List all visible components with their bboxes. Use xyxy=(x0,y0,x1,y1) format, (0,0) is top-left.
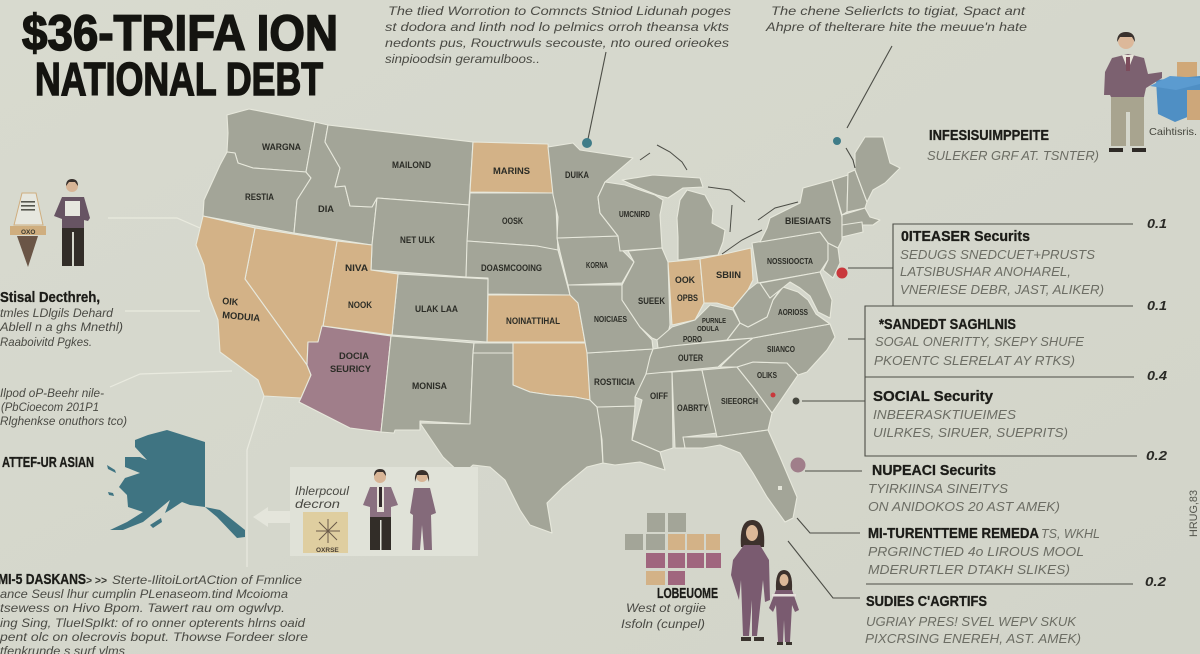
value labels xyxy=(1145,217,1167,589)
map state labels: PORO xyxy=(683,335,702,344)
panel: people callout: OXRSE xyxy=(316,547,339,554)
map state labels: NET ULK xyxy=(400,235,435,246)
text block: sudies cagrtifs: SUDIES C'AGRTIFS xyxy=(866,594,987,610)
map state labels: DUIKA xyxy=(565,170,589,181)
text block: nupeaci securits: NUPEACI Securits xyxy=(872,463,996,479)
text block: mi-5 daskans: > >> xyxy=(86,575,107,587)
map state labels: OOSK xyxy=(502,216,523,227)
legend caption: LOBEUOME xyxy=(657,586,718,602)
text block: stisal decthreh: Raaboivitd Pgkes. xyxy=(0,335,92,349)
text block: stisal decthreh: tmles LDlgils Dehard xyxy=(0,306,113,320)
map state labels: KORNA xyxy=(586,261,608,270)
text block: infesisumppeite xyxy=(927,128,1099,163)
arrow pointing left xyxy=(253,507,290,527)
map state labels: SUEEK xyxy=(638,296,665,307)
map state labels: OIK xyxy=(222,296,239,308)
text block: social security: UILRKES, SIRUER, SUEPRITS) xyxy=(873,425,1068,440)
map state labels: OIFF xyxy=(650,391,668,402)
map state labels: MONISA xyxy=(412,381,447,392)
top right text block xyxy=(765,4,1027,34)
text block: social security xyxy=(873,389,1068,440)
icon: man with boxes xyxy=(1104,32,1200,152)
text block: mi-5 daskans: Sterte-IlitoiLortACtion of Fmnlice xyxy=(112,573,302,587)
map state labels: AORIOSS xyxy=(778,308,809,317)
map state labels: MARINS xyxy=(493,166,530,177)
map state labels: OOK xyxy=(675,275,695,286)
text block: mi-5 daskans: MI-5 DASKANS xyxy=(0,572,86,588)
map state labels xyxy=(222,142,831,414)
text block: oiteaser securits xyxy=(900,229,1104,297)
value labels: 0.1 xyxy=(1147,299,1167,313)
map state labels: ULAK LAA xyxy=(415,304,458,315)
map state labels: OPBS xyxy=(677,293,698,304)
text block: mi-5 daskans: tsewess on Hivo Bpom. Tawert rau om ogwlvp. xyxy=(0,601,285,615)
text block: types of benefits: Ilpod oP-Beehr nile- xyxy=(0,386,104,400)
text block: sudies cagrtifs: UGRIAY PRES! SVEL WEPV SKUK xyxy=(866,614,1077,629)
map state labels: NOINATTIHAL xyxy=(506,316,560,327)
panel: people callout: decron xyxy=(295,497,340,511)
map state labels: SIIANCO xyxy=(767,345,795,354)
text block: oiteaser securits: SEDUGS SNEDCUET+PRUSTS xyxy=(900,247,1095,262)
icon: document stand and presenter: OXO xyxy=(21,229,35,236)
US state map xyxy=(196,109,900,533)
legend caption: West ot orgiie xyxy=(626,601,706,615)
text block: sandedt saghlnis: SOGAL ONERITTY, SKEPY SHUFE xyxy=(875,334,1084,349)
top right text block: The chene Selierlcts to tigiat, Spact ant xyxy=(771,4,1026,18)
map state labels: MAILOND xyxy=(392,160,431,171)
map state labels: RESTIA xyxy=(245,192,274,203)
map state labels: DOCIA xyxy=(339,351,369,362)
map state labels: MODUIA xyxy=(222,310,261,324)
vertical side note: HRUG,83 xyxy=(1188,490,1200,537)
text block: stisal decthreh: Stisal Decthreh, xyxy=(0,290,100,306)
text block: mi-turentteme remedats: MI-TURENTTEME REMEDA xyxy=(868,526,1039,542)
map state labels: BIESIAATS xyxy=(785,216,831,227)
callout: leader lines to map xyxy=(588,46,893,598)
intro text block: The tlied Worrotion to Comncts Stniod Lidunah poges xyxy=(388,4,731,18)
text block: infesisumppeite: SULEKER GRF AT. TSNTER) xyxy=(927,148,1099,163)
panel: people callout xyxy=(253,467,478,556)
icon: man with boxes: Caihtisris. xyxy=(1149,126,1197,138)
value labels: 0.2 xyxy=(1146,449,1167,463)
map state labels: OABRTY xyxy=(677,403,709,414)
intro text block: sinpioodsin geramulboos.. xyxy=(385,52,540,66)
text block: oiteaser securits: 0ITEASER Securits xyxy=(901,229,1030,245)
map state labels: DIA xyxy=(318,204,334,215)
map state labels: NOOK xyxy=(348,300,372,311)
text block: mi-turentteme remedats: TS, WKHL xyxy=(1041,526,1100,541)
map state labels: DOASMCOOING xyxy=(481,263,542,274)
text block: sandedt saghlnis xyxy=(874,317,1084,368)
top right text block: Ahpre of thelterare hite the meuue'n hate xyxy=(765,20,1027,34)
alaska label: ATTEF-UR ASIAN xyxy=(2,455,94,471)
text block: sandedt saghlnis: *SANDEDT SAGHLNIS xyxy=(879,317,1016,333)
text block: mi-5 daskans: pent olc on olecrovis boput. Thowse Fordeer slore xyxy=(0,630,308,644)
text block: mi-turentteme remedats: PRGRINCTIED 4o LIROUS MOOL xyxy=(868,544,1084,559)
text block: types of benefits: (PbCioecom 201P1 xyxy=(1,400,99,414)
text block: types of benefits: Rlghenkse onuthors tco) xyxy=(0,414,127,428)
text block: social security: INBEERASKTIUEIMES xyxy=(873,407,1016,422)
text block: types of benefits xyxy=(0,386,127,428)
legend caption: Isfoln (cunpel) xyxy=(621,617,705,631)
map state labels: ROSTIICIA xyxy=(594,377,635,388)
text block: stisal decthreh: Ablell n a ghs Mnethl) xyxy=(0,320,123,334)
map state labels: SBIIN xyxy=(716,270,741,281)
map state labels: OLIKS xyxy=(757,371,778,380)
map state labels: SEURICY xyxy=(330,364,372,375)
left pointer lines xyxy=(108,218,264,567)
text block: nupeaci securits: ON ANIDOKOS 20 AST AMEK) xyxy=(868,499,1060,514)
text block: mi-5 daskans xyxy=(0,572,308,654)
right panel frame lines xyxy=(865,224,1137,584)
map state labels: ODULA xyxy=(697,324,719,333)
text block: social security: SOCIAL Security xyxy=(873,389,993,405)
map marker dots xyxy=(582,137,848,490)
icon: document stand and presenter xyxy=(10,179,90,267)
title: NATIONAL DEBT xyxy=(35,53,323,105)
map state labels: PURNLE xyxy=(702,316,726,325)
title xyxy=(22,5,338,105)
map state labels: NOICIAES xyxy=(594,315,628,324)
text block: nupeaci securits xyxy=(868,463,1060,514)
map state labels: SIEEORCH xyxy=(721,397,758,406)
panel: people callout: Ihlerpcoul xyxy=(295,484,349,498)
text block: sandedt saghlnis: PKOENTC SLERELAT AY RTKS) xyxy=(874,353,1075,368)
legend grid xyxy=(621,513,721,631)
value labels: 0.4 xyxy=(1147,369,1167,383)
text block: sudies cagrtifs xyxy=(865,594,1081,646)
map state labels: NIVA xyxy=(345,263,368,274)
value labels: 0.2 xyxy=(1145,575,1166,589)
text block: sudies cagrtifs: PIXCRSING ENEREH, AST. AMEK) xyxy=(865,631,1081,646)
text block: oiteaser securits: LATSIBUSHAR ANOHAREL, xyxy=(900,264,1071,279)
text block: mi-5 daskans: ance Seusl lhur cumplin PLenaseom.tind Mcoioma xyxy=(0,587,288,601)
text block: stisal decthreh xyxy=(0,290,123,349)
text block: nupeaci securits: TYIRKIINSA SINEITYS xyxy=(868,481,1008,496)
title: $36-TRIFA ION xyxy=(22,5,338,61)
icon: woman and child xyxy=(731,520,799,645)
text block: mi-turentteme remedats xyxy=(868,526,1100,577)
text block: infesisumppeite: INFESISUIMPPEITE xyxy=(929,128,1049,144)
map state labels: WARGNA xyxy=(262,142,301,153)
great lakes outlines xyxy=(640,145,798,254)
map state labels: OUTER xyxy=(678,353,703,364)
value labels: 0.1 xyxy=(1147,217,1167,231)
map state labels: NOSSIOOCTA xyxy=(767,257,813,266)
text block: oiteaser securits: VNERIESE DEBR, JAST, ALIKER) xyxy=(900,282,1104,297)
legend caption xyxy=(621,586,718,631)
alaska map xyxy=(107,430,245,538)
text block: mi-5 daskans: ing Sing, TlueISpIkt: of ro onner opterents hlrns oaid xyxy=(0,616,305,630)
map state labels: UMCNIRD xyxy=(619,210,650,219)
intro text block: st dodora and linth nod lo pelmics orroh theansa vkts xyxy=(385,20,729,34)
intro text block xyxy=(385,4,731,66)
intro text block: nedonts pus, Rouctrwuls secouste, nto oured orieokes xyxy=(385,36,729,50)
text block: mi-turentteme remedats: MDERURTLER DTAKH SLIKES) xyxy=(868,562,1070,577)
